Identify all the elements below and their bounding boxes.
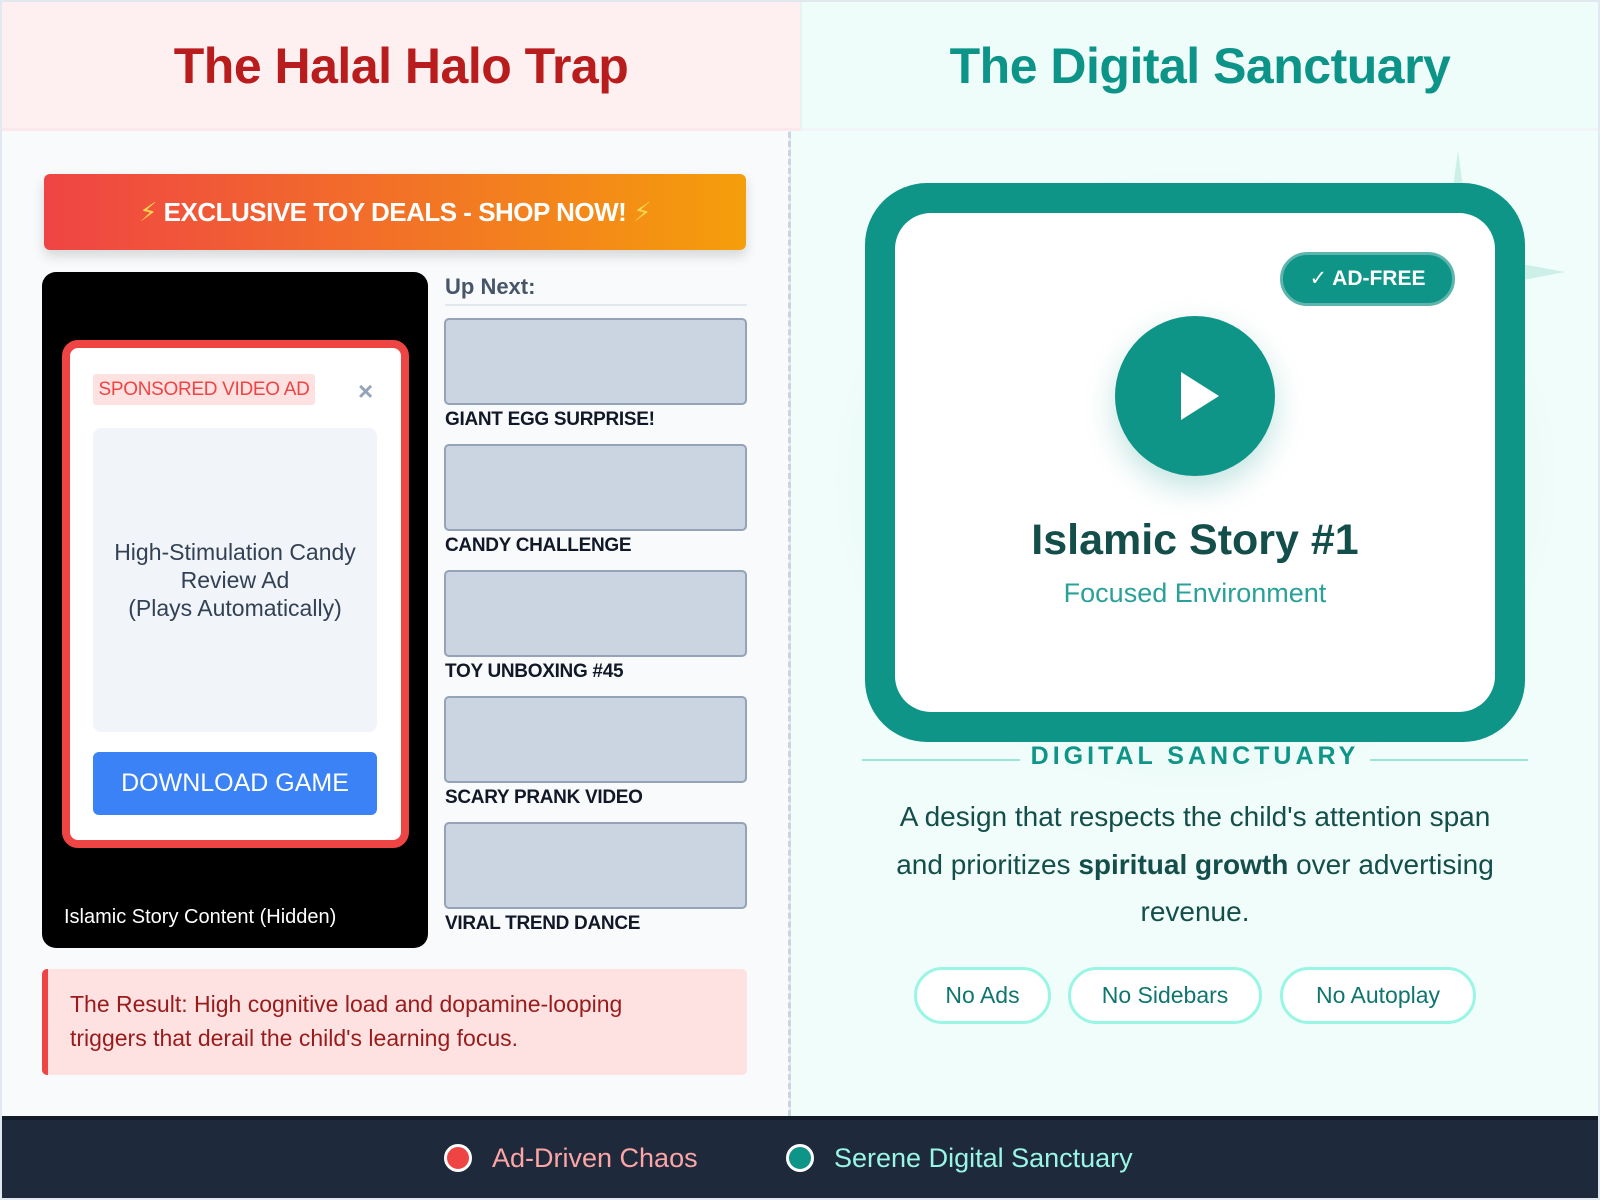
footer legend <box>2 1116 1598 1198</box>
pill: no ads: No Ads <box>945 982 1020 1008</box>
ad content box: High-Stimulation Candy <box>114 539 356 565</box>
title: right: The Digital Sanctuary <box>950 38 1450 94</box>
thumb 5 <box>444 822 747 909</box>
decorative star <box>1454 151 1564 280</box>
ad-free badge: ✓ AD-FREE <box>1310 267 1425 290</box>
label 5: VIRAL TREND DANCE <box>445 913 640 934</box>
glow <box>820 160 1570 800</box>
download button: DOWNLOAD GAME <box>121 769 349 797</box>
video player <box>42 272 428 948</box>
sanctuary player card <box>865 183 1525 742</box>
ad content box <box>93 428 377 732</box>
up next heading <box>445 274 747 306</box>
right panel background <box>791 2 1598 1116</box>
subtitle: Focused Environment <box>1064 578 1326 608</box>
right header <box>800 2 1598 131</box>
sponsored label <box>93 374 315 405</box>
pill: no ads <box>914 967 1051 1024</box>
result callout: The Result: High cognitive load and dopamine-looping <box>70 991 622 1017</box>
left header <box>2 2 800 131</box>
ad content box: Review Ad <box>181 567 289 593</box>
play button <box>1115 316 1275 476</box>
ad-free badge <box>1280 252 1455 306</box>
thumb 1 <box>444 318 747 405</box>
pill: no autoplay <box>1280 967 1476 1024</box>
label 3: TOY UNBOXING #45 <box>445 661 623 682</box>
up next heading: Up Next: <box>445 274 535 299</box>
thumb 2 <box>444 444 747 531</box>
pill: no sidebars <box>1068 967 1262 1024</box>
video title: Islamic Story #1 <box>1031 516 1359 564</box>
close icon: × <box>358 376 373 406</box>
sponsored label: SPONSORED VIDEO AD <box>98 379 310 400</box>
pill: no sidebars: No Sidebars <box>1102 982 1228 1008</box>
banner ad: ⚡ EXCLUSIVE TOY DEALS - SHOP NOW! ⚡ <box>139 197 651 227</box>
description <box>896 801 1494 927</box>
thumb 4 <box>444 696 747 783</box>
description: and prioritizes spiritual growth over advertising <box>896 848 1494 880</box>
thumb 3 <box>444 570 747 657</box>
legend: chaos: Ad-Driven Chaos <box>492 1142 698 1172</box>
description: revenue. <box>1141 896 1249 927</box>
section label: DIGITAL SANCTUARY <box>1031 742 1359 770</box>
left panel background <box>2 2 789 1116</box>
ad content box: (Plays Automatically) <box>128 595 342 621</box>
hidden content caption: Islamic Story Content (Hidden) <box>64 906 336 928</box>
description: A design that respects the child's attention span <box>900 801 1490 832</box>
label 2: CANDY CHALLENGE <box>445 535 631 556</box>
result callout: triggers that derail the child's learning focus. <box>70 1025 518 1051</box>
divider <box>788 132 791 1116</box>
inner screen <box>895 213 1495 712</box>
legend: sanctuary: Serene Digital Sanctuary <box>834 1142 1133 1172</box>
result callout <box>42 969 747 1075</box>
pill: no autoplay: No Autoplay <box>1316 982 1440 1008</box>
banner ad <box>44 174 746 250</box>
title: left: The Halal Halo Trap <box>174 38 628 94</box>
label 1: GIANT EGG SURPRISE! <box>445 409 655 430</box>
ad popup <box>62 340 409 848</box>
download button <box>93 752 377 815</box>
label 4: SCARY PRANK VIDEO <box>445 787 643 808</box>
